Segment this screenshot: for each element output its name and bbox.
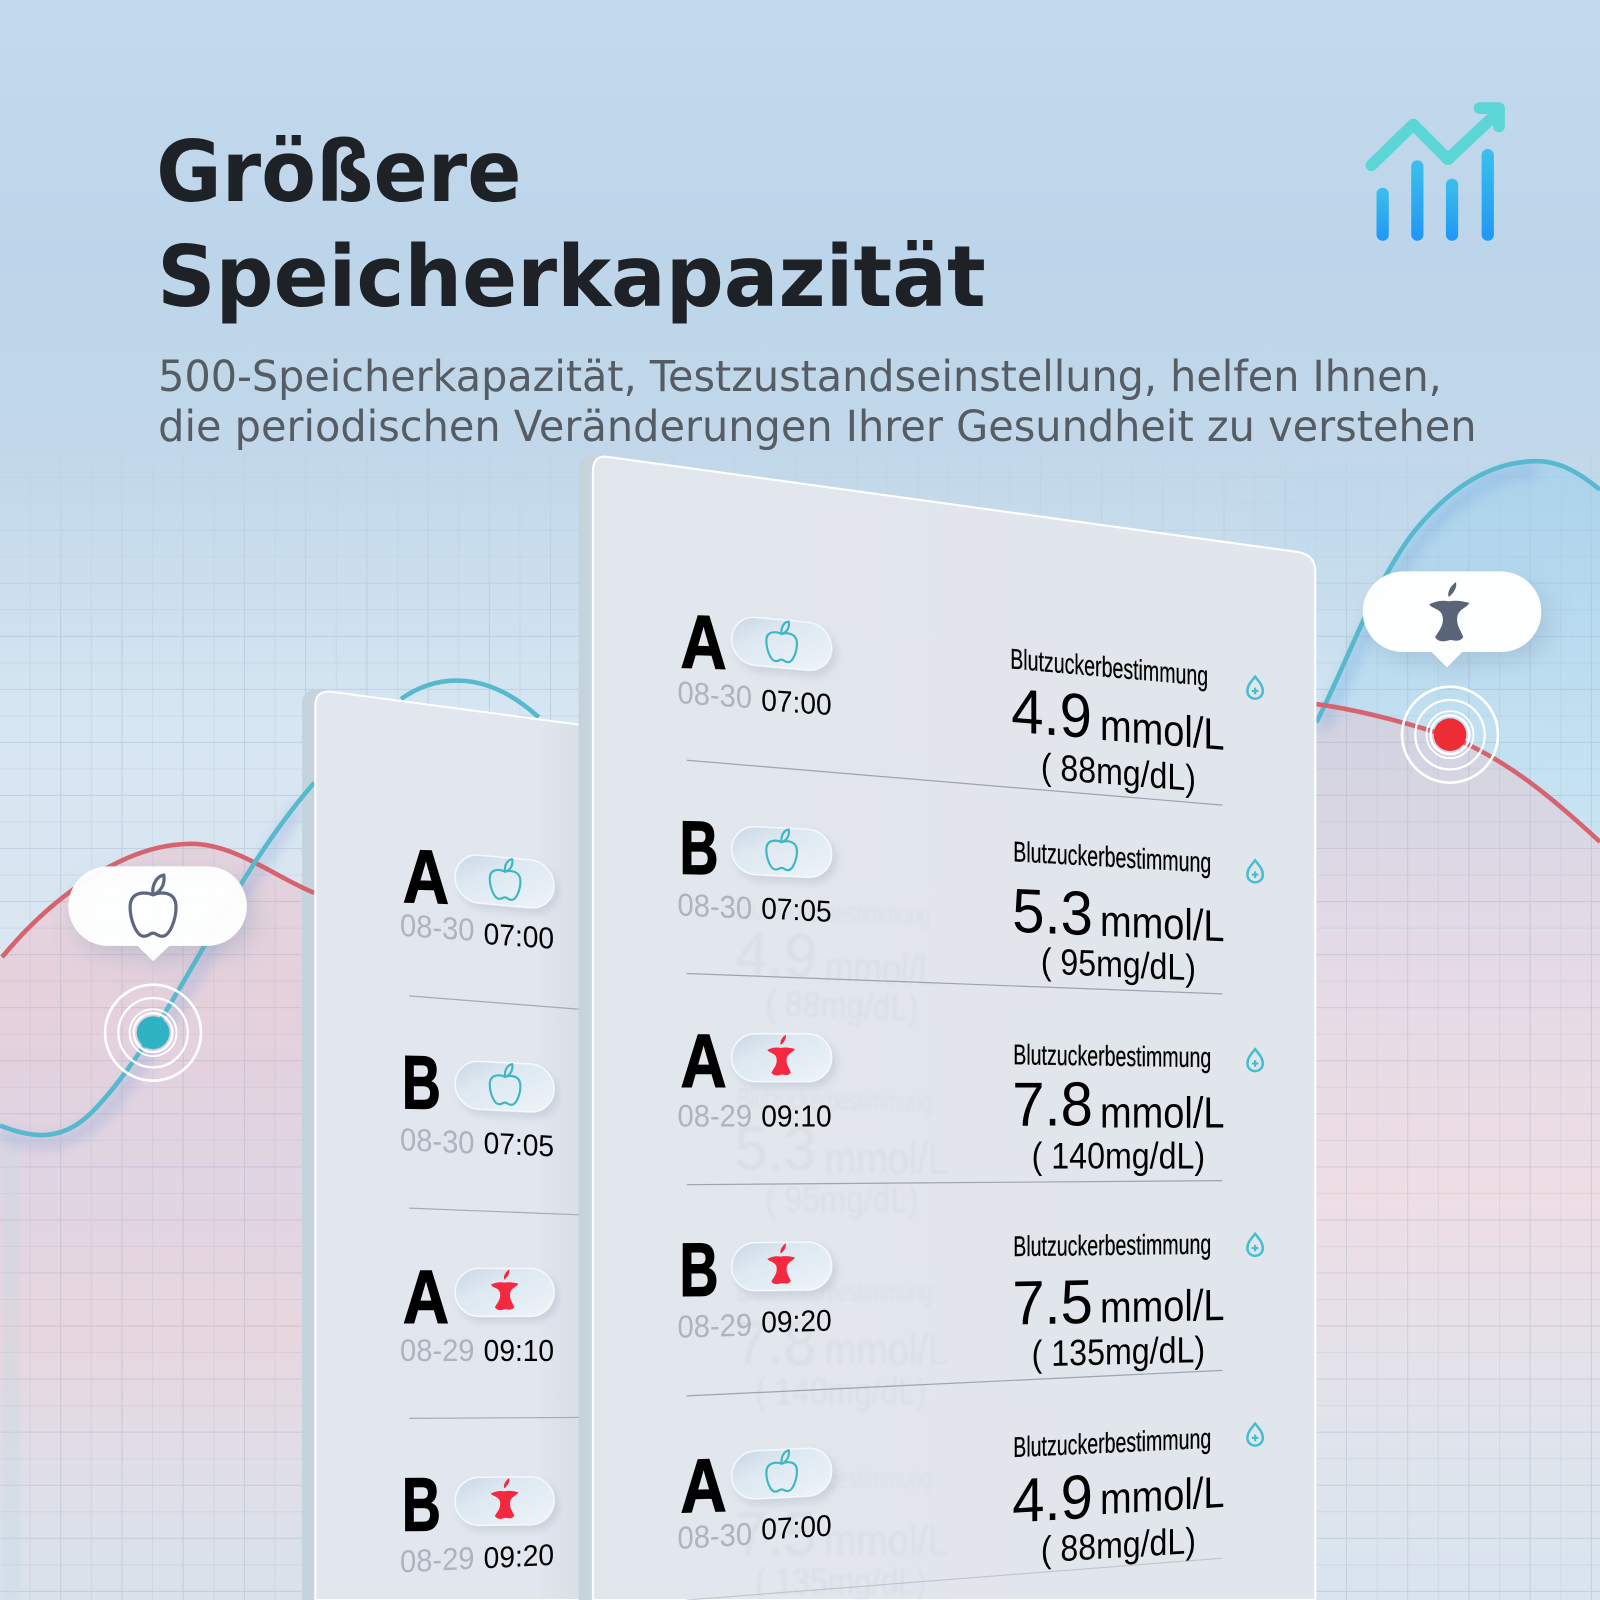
left card row 1 — [400, 835, 592, 1010]
main card row 4: ( 135mg/dL) — [1032, 1329, 1205, 1374]
subtitle: 500-Speicherkapazität, Testzustandseinstellung, helfen Ihnen, — [158, 352, 1442, 402]
main card row 1: 07:00 — [761, 684, 832, 722]
main card row 2: B — [680, 806, 718, 891]
ghost reflection text: 7.5 — [735, 1500, 816, 1569]
panel: main record card — [579, 454, 1315, 1600]
left card row 2: B — [402, 1041, 441, 1126]
main card row 2: Blutzuckerbestimmung — [1013, 836, 1211, 880]
left card row 3: 09:10 — [484, 1335, 554, 1368]
left card row 3 — [400, 1255, 592, 1418]
main card row 4: 08-29 — [678, 1307, 752, 1345]
main card row 2: ( 95mg/dL) — [1041, 940, 1196, 988]
main card row 1: 4.9 — [1011, 677, 1092, 752]
main card row 4: 7.5 — [1012, 1268, 1093, 1338]
callout: right core bubble — [1363, 571, 1541, 667]
main card row 2: mmol/L — [1100, 897, 1224, 951]
chart area: pink fill under left red curve — [0, 844, 327, 1600]
left card row 2: 08-30 — [400, 1121, 474, 1161]
main card row 3: Blutzuckerbestimmung — [1013, 1039, 1211, 1074]
main card row 4: mmol/L — [1100, 1281, 1224, 1332]
title: Speicherkapazität — [157, 227, 986, 326]
curve: right red — [1316, 704, 1600, 842]
left card row 4: B — [402, 1463, 441, 1548]
main card row 3: 09:10 — [761, 1101, 832, 1134]
main card row 1: mmol/L — [1100, 701, 1224, 760]
main card row 3: 08-29 — [678, 1098, 752, 1134]
main card row 5 — [678, 1423, 1263, 1600]
main card row 2: 5.3 — [1012, 877, 1093, 949]
ghost reflection text: Blutzuckerbestimmung — [737, 1083, 933, 1119]
main card row 4: 09:20 — [761, 1305, 832, 1340]
marker: left teal point — [105, 985, 201, 1081]
curve: left teal — [0, 783, 314, 1135]
main card row 3: ( 140mg/dL) — [1032, 1135, 1205, 1176]
left card row 1: A — [403, 835, 449, 920]
left card row 2 — [400, 1041, 592, 1215]
ghost reflection text — [734, 893, 949, 1600]
main card row 5: A — [681, 1444, 727, 1529]
ghost reflection text: ( 140mg/dL) — [755, 1371, 927, 1412]
grid — [0, 504, 1600, 1600]
main card row 1: ( 88mg/dL) — [1041, 746, 1196, 799]
main card row 5: ( 88mg/dL) — [1041, 1520, 1196, 1570]
main card row 1: Blutzuckerbestimmung — [1010, 643, 1208, 693]
left edge band — [2, 1133, 20, 1600]
ghost reflection text: Blutzuckerbestimmung — [734, 893, 931, 932]
panel edge: left card bevel — [302, 689, 342, 1600]
subtitle: die periodischen Veränderungen Ihrer Gesundheit zu verstehen — [158, 402, 1477, 452]
ghost reflection text: mmol/L — [824, 943, 938, 996]
title: Größere — [156, 122, 521, 221]
main card row 5: mmol/L — [1100, 1468, 1224, 1524]
main card row 4: B — [680, 1229, 718, 1313]
subtitle — [158, 352, 1477, 452]
main card row 5: 07:00 — [761, 1510, 832, 1547]
ghost reflection text: Blutzuckerbestimmung — [737, 1276, 933, 1308]
main card row 2: 07:05 — [761, 892, 832, 929]
main card row 4: Blutzuckerbestimmung — [1013, 1229, 1211, 1263]
left card row 1: 08-30 — [400, 907, 474, 948]
left card row 4: 09:20 — [484, 1539, 554, 1575]
chart area: pink fill under right red curve — [1316, 704, 1600, 1600]
ghost reflection text: mmol/L — [824, 1516, 949, 1565]
ghost reflection text: 4.9 — [734, 920, 818, 991]
main card row 1: A — [681, 600, 727, 686]
main card row 3: A — [681, 1020, 727, 1104]
main card row 5: 4.9 — [1012, 1463, 1093, 1536]
callout: left apple bubble — [68, 866, 247, 961]
main card row 4 — [678, 1229, 1263, 1396]
icon: rising chart — [1371, 108, 1499, 241]
ghost reflection text: mmol/L — [824, 1325, 949, 1374]
main card row 2 — [678, 806, 1263, 994]
left card row 1: 07:00 — [484, 918, 554, 956]
ghost reflection text: 5.3 — [735, 1114, 816, 1183]
main card row 2: 08-30 — [678, 886, 752, 926]
panel: left record card — [315, 692, 593, 1600]
main card row 5: Blutzuckerbestimmung — [1013, 1423, 1211, 1464]
left card row 3: A — [403, 1255, 449, 1339]
curve: right teal — [1316, 461, 1600, 722]
title — [156, 122, 986, 326]
main card row 1 — [678, 600, 1263, 805]
main card row 3 — [678, 1020, 1263, 1185]
main card row 1: 08-30 — [678, 674, 752, 715]
left card row 4 — [400, 1463, 554, 1579]
left card row 4: 08-29 — [400, 1540, 474, 1579]
left card row 2: 07:05 — [484, 1127, 554, 1164]
main card row 3: mmol/L — [1100, 1089, 1224, 1138]
ghost reflection text: 7.8 — [735, 1309, 816, 1378]
curve shadows — [0, 471, 1537, 1143]
left card row 3: 08-29 — [400, 1332, 474, 1368]
chart area: blue fill under right teal curve — [1316, 461, 1600, 847]
marker: right red point — [1402, 687, 1498, 783]
curve: left red — [2, 844, 314, 957]
ghost reflection text: ( 88mg/dL) — [765, 982, 919, 1029]
main card row 3: 7.8 — [1012, 1071, 1093, 1140]
main card row 5: 08-30 — [678, 1516, 752, 1556]
ghost reflection text: ( 95mg/dL) — [765, 1179, 918, 1220]
curve: teal hump above left panel — [401, 681, 539, 717]
ghost reflection text: mmol/L — [824, 1134, 949, 1183]
ghost reflection text: Blutzuckerbestimmung — [737, 1463, 933, 1495]
